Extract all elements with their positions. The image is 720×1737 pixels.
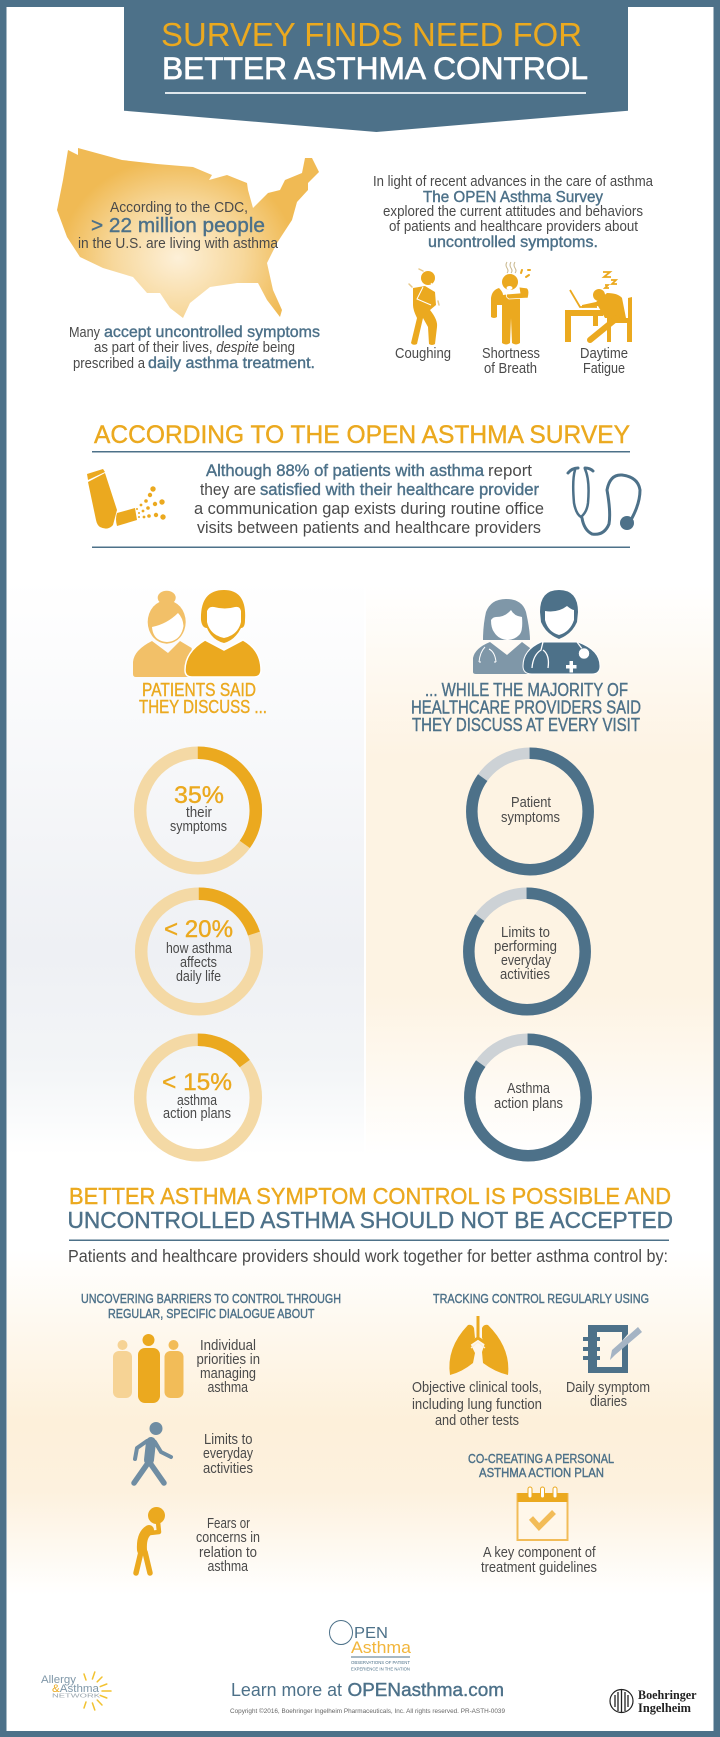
- donut: under 15% action plans: < 15%: [162, 1069, 232, 1096]
- heading: providers said: ... WHILE THE MAJORITY OF: [425, 679, 628, 700]
- text block: individual priorities: priorities in: [196, 1352, 260, 1368]
- text block: OPEN Asthma Survey intro: [373, 174, 654, 251]
- text block: fears or concerns: Fears or: [207, 1516, 250, 1532]
- donut: patient symptoms: symptoms: [501, 810, 560, 826]
- logo: OPEN Asthma: OBSERVATIONS OF PATIENT: [351, 1660, 410, 1665]
- text block: communication gap: visits between patients and healthcare providers: [197, 518, 541, 537]
- donut: limits to performing everyday activities: [469, 893, 585, 1010]
- text block: communication gap: a communication gap exists during routine office: [194, 499, 544, 518]
- logo: OPEN Asthma: PEN: [354, 1625, 388, 1642]
- heading: providers said: HEALTHCARE PROVIDERS SAID: [411, 696, 641, 718]
- logo: Boehringer Ingelheim: Ingelheim: [638, 1700, 691, 1715]
- text block: objective clinical tools: and other tests: [435, 1413, 519, 1429]
- heading: providers said: [411, 679, 641, 735]
- text block: fears or concerns: asthma: [208, 1559, 249, 1575]
- text block: individual priorities: [196, 1338, 260, 1396]
- text block: individual priorities: asthma: [208, 1380, 249, 1396]
- donut: under 15% action plans: action plans: [163, 1106, 231, 1122]
- text block: fears or concerns: concerns in: [196, 1530, 260, 1546]
- icon: inhaler: [87, 469, 166, 529]
- heading: patients said: THEY DISCUSS ...: [139, 696, 267, 717]
- donut: 35% their symptoms: 35%: [174, 782, 224, 809]
- text block: communication gap: report: [488, 461, 532, 480]
- text block: communication gap: they are: [200, 480, 256, 499]
- text block: OPEN Asthma Survey intro: In light of recent advances in the care of asthma: [373, 174, 654, 190]
- text block: OPEN Asthma Survey intro: The OPEN Asthma Survey: [423, 189, 603, 206]
- heading: better asthma symptom control: BETTER ASTHMA SYMPTOM CONTROL IS POSSIBLE AND: [69, 1183, 671, 1209]
- text block: OPEN Asthma Survey intro: uncontrolled symptoms.: [428, 234, 598, 251]
- donut: under 20% daily life: < 20%: [164, 916, 233, 943]
- icon: three people: [113, 1334, 184, 1403]
- donut: asthma action plans: Asthma: [507, 1081, 551, 1097]
- donut: limits to performing everyday activities: everyday: [501, 953, 552, 969]
- call to action: learn more: Learn more at: [231, 1680, 342, 1700]
- logo: OPEN Asthma: EXPERIENCE IN THE NATION: [351, 1666, 410, 1672]
- text block: communication gap: Although 88% of patients with asthma: [206, 461, 485, 480]
- donut: 35% their symptoms: [140, 753, 256, 868]
- call to action: learn more: OPENasthma.com: [348, 1680, 504, 1700]
- map of the United States with statistic: [57, 148, 319, 318]
- donut: under 20% daily life: affects: [180, 955, 217, 971]
- donut: limits to performing everyday activities: Limits to: [501, 925, 550, 941]
- icon: worried person: [136, 1507, 165, 1573]
- icon: stethoscope: [568, 468, 640, 534]
- text block: key component: treatment guidelines: [481, 1560, 597, 1576]
- donut: 35% their symptoms: their: [186, 805, 212, 821]
- icon: symptom diary notebook: [583, 1325, 642, 1373]
- logo: Boehringer Ingelheim: [610, 1687, 697, 1715]
- text block: objective clinical tools: Objective clinical tools,: [412, 1380, 542, 1396]
- map of the United States with statistic: > 22 million people: [91, 215, 265, 237]
- text block: objective clinical tools: [412, 1380, 542, 1429]
- heading: patients said: PATIENTS SAID: [142, 679, 256, 700]
- heading: better asthma symptom control: [68, 1183, 673, 1241]
- donut: under 15% action plans: asthma: [177, 1093, 218, 1109]
- text block: uncontrolled symptoms accepted: accept uncontrolled symptoms: [104, 324, 320, 341]
- icon: lungs: [449, 1316, 508, 1375]
- column heading: uncovering barriers: [81, 1291, 341, 1321]
- text block: daily symptom diaries: Daily symptom: [566, 1380, 650, 1396]
- logo: Allergy and Asthma Network: NETWORK: [52, 1694, 101, 1700]
- text block: communication gap: [92, 461, 630, 548]
- icon: patients: [133, 590, 261, 677]
- text block: uncontrolled symptoms accepted: as part of their lives, despite being: [94, 340, 295, 356]
- panel: patients background: [7, 580, 364, 1155]
- title line one: SURVEY FINDS NEED FOR: [161, 17, 582, 54]
- text block: communication gap: satisfied with their healthcare provider: [260, 480, 539, 499]
- heading: patients said: [139, 679, 267, 717]
- logo: Boehringer Ingelheim: Boehringer: [638, 1687, 697, 1702]
- symptom icon labels: Coughing: [395, 346, 451, 362]
- panel: recommendations background: [7, 1250, 714, 1595]
- panel: providers background: [366, 585, 714, 1155]
- column heading: co-creating a plan: CO-CREATING A PERSONAL: [468, 1451, 614, 1466]
- call to action: learn more: [231, 1680, 504, 1700]
- text block: fears or concerns: [196, 1516, 260, 1575]
- donut: patient symptoms: Patient: [511, 795, 551, 811]
- text block: OPEN Asthma Survey intro: of patients and healthcare providers about: [389, 219, 638, 235]
- title banner: [124, 0, 628, 132]
- text block: individual priorities: Individual: [200, 1338, 256, 1354]
- donut: asthma action plans: action plans: [494, 1096, 563, 1112]
- text block: daily symptom diaries: [566, 1380, 650, 1410]
- text block: uncontrolled symptoms accepted: daily asthma treatment.: [148, 355, 315, 372]
- text block: daily symptom diaries: diaries: [590, 1394, 627, 1410]
- text block: objective clinical tools: including lung function: [412, 1397, 542, 1413]
- heading: better asthma symptom control: UNCONTROLLED ASTHMA SHOULD NOT BE ACCEPTED: [68, 1207, 673, 1233]
- text block: limits to everyday activities: [203, 1432, 254, 1477]
- icon: coughing figure: [409, 269, 439, 345]
- symptom icon labels: [395, 346, 628, 377]
- donut: under 15% action plans: [140, 1040, 256, 1155]
- column heading: co-creating a plan: ASTHMA ACTION PLAN: [479, 1465, 604, 1480]
- text block: limits to everyday activities: Limits to: [204, 1432, 252, 1448]
- text block: key component: A key component of: [483, 1545, 596, 1561]
- heading: according to the OPEN Asthma Survey: ACCORDING TO THE OPEN ASTHMA SURVEY: [94, 421, 630, 449]
- subheading: work together: Patients and healthcare providers should work together for better asthma control by:: [68, 1246, 668, 1266]
- donut: limits to performing everyday activities: activities: [500, 967, 550, 983]
- icon: daytime fatigue figure: [565, 272, 632, 342]
- donut: 35% their symptoms: symptoms: [170, 819, 227, 835]
- text block: key component: [481, 1545, 597, 1576]
- icon: healthcare providers: [473, 590, 600, 674]
- title line two: BETTER ASTHMA CONTROL: [162, 50, 588, 86]
- copyright: Copyright ©2016, Boehringer Ingelheim Pharmaceuticals, Inc. All rights reserved. PR-ASTH-0039: [230, 1708, 506, 1715]
- text block: limits to everyday activities: everyday: [203, 1446, 254, 1462]
- text block: OPEN Asthma Survey intro: explored the current attitudes and behaviors: [383, 204, 643, 220]
- icon: walking person: [134, 1422, 171, 1483]
- donut: limits to performing everyday activities: performing: [494, 939, 557, 955]
- donut: under 20% daily life: how asthma: [166, 941, 233, 957]
- symptom icon labels: Fatigue: [583, 361, 625, 377]
- logo: Allergy and Asthma Network: &Asthma: [52, 1683, 100, 1695]
- map of the United States with statistic: in the U.S. are living with asthma: [78, 236, 279, 252]
- symptom icon labels: Shortness: [482, 346, 540, 362]
- text block: uncontrolled symptoms accepted: prescribed a: [73, 356, 146, 372]
- logo: OPEN Asthma: [330, 1620, 412, 1672]
- icon: shortness of breath figure: [491, 262, 530, 344]
- symptom icon labels: Daytime: [580, 346, 628, 362]
- icon: calendar with check mark: [518, 1487, 568, 1540]
- map of the United States with statistic: According to the CDC,: [110, 200, 248, 216]
- logo: OPEN Asthma: Asthma: [351, 1638, 412, 1657]
- text block: limits to everyday activities: activities: [203, 1461, 253, 1477]
- text block: individual priorities: managing: [200, 1366, 256, 1382]
- column heading: uncovering barriers: REGULAR, SPECIFIC DIALOGUE ABOUT: [108, 1306, 315, 1321]
- column heading: uncovering barriers: UNCOVERING BARRIERS TO CONTROL THROUGH: [81, 1291, 341, 1306]
- text block: fears or concerns: relation to: [199, 1545, 257, 1561]
- text block: uncontrolled symptoms accepted: Many: [69, 325, 101, 341]
- donut: patient symptoms: [472, 753, 588, 870]
- donut: under 20% daily life: daily life: [176, 969, 221, 985]
- symptom icon labels: of Breath: [484, 361, 537, 377]
- donut: asthma action plans: [470, 1039, 586, 1156]
- donut: under 20% daily life: [141, 894, 257, 1009]
- column heading: co-creating a plan: [468, 1451, 614, 1480]
- text block: uncontrolled symptoms accepted: [69, 324, 320, 372]
- column heading: tracking control: TRACKING CONTROL REGULARLY USING: [433, 1291, 649, 1306]
- logo: Allergy and Asthma Network: [41, 1672, 111, 1710]
- heading: providers said: THEY DISCUSS AT EVERY VISIT: [412, 714, 640, 735]
- logo: Allergy and Asthma Network: Allergy: [41, 1674, 77, 1686]
